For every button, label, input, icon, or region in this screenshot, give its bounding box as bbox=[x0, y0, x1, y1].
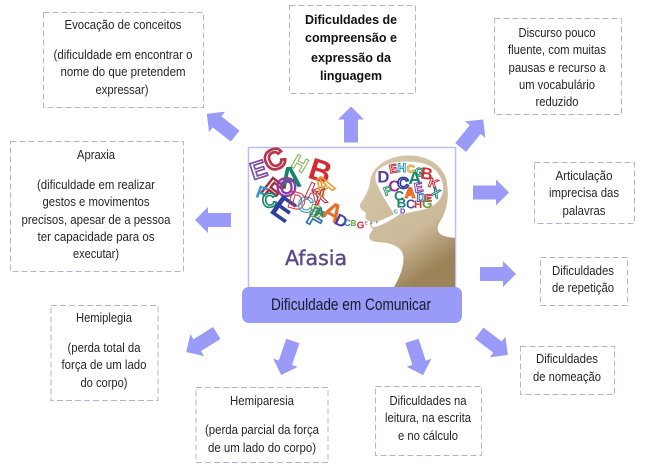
icon: letters inside the brain: H bbox=[397, 161, 406, 175]
box: Dificuldades de compreensão e expressão da linguagem: compreensão e bbox=[305, 30, 397, 45]
arrow: to Leitura bbox=[400, 337, 435, 379]
box: Apraxia: ter capacidade para os bbox=[38, 229, 155, 244]
box: Articulação imprecisa das palavras: Articulação bbox=[556, 168, 612, 183]
box: Hemiplegia bbox=[51, 306, 158, 400]
arrow: to Dificuldades de compreensão bbox=[338, 106, 364, 142]
box: Evocação de conceitos: Evocação de conceitos bbox=[64, 17, 182, 32]
icon: letters inside the brain: H bbox=[414, 199, 422, 211]
box: Hemiplegia: Hemiplegia bbox=[76, 310, 133, 325]
icon: letters spoken from the mouth bbox=[247, 141, 379, 235]
icon: letters inside the brain: A bbox=[405, 184, 415, 200]
icon: letters inside the brain: C bbox=[397, 175, 409, 192]
icon: letters inside the brain: C bbox=[394, 188, 404, 204]
banner: Dificuldade em Comunicar: Dificuldade em Comunicar bbox=[271, 296, 431, 314]
icon: letters spoken from the mouth: B bbox=[351, 219, 357, 228]
box: Dificuldades na leitura, na escrita e no cálculo: e no cálculo bbox=[398, 428, 458, 443]
icon: letters spoken from the mouth: D bbox=[332, 210, 351, 232]
box: Apraxia: executar) bbox=[73, 246, 119, 261]
box: Dificuldades de compreensão e expressão da linguagem bbox=[290, 6, 416, 94]
box: Dificuldades de nomeação: de nomeação bbox=[533, 369, 601, 384]
icon: letters inside the brain: F bbox=[382, 183, 393, 199]
box: Articulação imprecisa das palavras: palavras bbox=[562, 203, 606, 218]
icon: letters spoken from the mouth: A bbox=[313, 203, 326, 221]
icon: letters spoken from the mouth: C bbox=[344, 218, 351, 228]
icon: letters inside the brain: A bbox=[408, 168, 421, 188]
box: Dificuldades de nomeação bbox=[520, 346, 614, 394]
arrow: to Articulação bbox=[473, 180, 509, 206]
icon: letters spoken from the mouth: F bbox=[253, 182, 270, 204]
box: Dificuldades na leitura, na escrita e no cálculo bbox=[376, 386, 482, 456]
box: Articulação imprecisa das palavras: imprecisa das bbox=[549, 185, 619, 200]
icon: letters inside the brain: B bbox=[419, 163, 434, 184]
icon: letters spoken from the mouth: D bbox=[285, 186, 309, 217]
icon: letters spoken from the mouth: E bbox=[264, 188, 302, 230]
icon: letters spoken from the mouth: O bbox=[275, 173, 297, 203]
panel: central illustration bbox=[247, 141, 456, 290]
icon: letters spoken from the mouth: B bbox=[307, 200, 325, 222]
icon: letters inside the brain: K bbox=[426, 175, 441, 192]
icon: letters inside the brain: X bbox=[429, 185, 443, 202]
arrow: to Apraxia bbox=[195, 207, 231, 233]
icon: letters inside the brain: C bbox=[406, 198, 415, 212]
icon: letters inside the brain: E bbox=[425, 194, 432, 205]
box: Dificuldades de compreensão e expressão da linguagem: linguagem bbox=[320, 68, 382, 83]
icon: letters spoken from the mouth: F bbox=[256, 172, 289, 207]
box: Discurso pouco fluente: um vocabulário bbox=[519, 77, 595, 92]
arrow: to Repetição bbox=[480, 261, 516, 287]
box: Apraxia: (dificuldade em realizar bbox=[37, 177, 156, 192]
icon: letters spoken from the mouth: E bbox=[247, 155, 270, 186]
icon: letters spoken from the mouth: F bbox=[376, 220, 379, 224]
icon: letters spoken from the mouth: G bbox=[357, 220, 365, 231]
icon: letters inside the brain: C bbox=[407, 164, 415, 176]
arrow: to Nomeação bbox=[471, 323, 516, 365]
arrow: to Discurso bbox=[451, 111, 493, 156]
box: Hemiparesia: (perda parcial da força bbox=[205, 422, 320, 437]
box: Apraxia: precisos, apesar de a pessoa bbox=[22, 212, 171, 227]
icon: letters inside the brain: E bbox=[413, 179, 424, 196]
icon: letters spoken from the mouth: A bbox=[309, 169, 339, 203]
box: Hemiparesia: de um lado do corpo) bbox=[208, 440, 316, 455]
box: Apraxia: gestos e movimentos bbox=[42, 194, 150, 209]
box: Dificuldades de compreensão e expressão da linguagem: expressão da bbox=[311, 50, 392, 65]
box: Dificuldades de repetição: de repetição bbox=[552, 280, 614, 295]
icon: letters spoken from the mouth: K bbox=[301, 178, 329, 210]
box: Hemiparesia: Hemiparesia bbox=[230, 393, 295, 408]
icon: letters spoken from the mouth: B bbox=[305, 152, 336, 191]
box: Evocação de conceitos: nome do que pretendem bbox=[60, 64, 186, 79]
icon: head silhouette bbox=[360, 155, 455, 287]
arrow: to Hemiparesia bbox=[269, 337, 305, 379]
icon: letters inside the brain: G bbox=[413, 165, 425, 180]
icon: letters spoken from the mouth: C bbox=[260, 189, 278, 213]
box: Dificuldades de nomeação: Dificuldades bbox=[536, 351, 598, 366]
box: Hemiparesia bbox=[196, 388, 328, 462]
box: Hemiplegia: do corpo) bbox=[80, 375, 128, 390]
box: Articulação imprecisa das palavras bbox=[534, 162, 634, 224]
icon: letters inside the brain: D bbox=[400, 206, 405, 215]
icon: letters inside the brain: E bbox=[388, 161, 398, 176]
box: Discurso pouco fluente: Discurso pouco bbox=[518, 25, 596, 40]
icon: letters spoken from the mouth: F bbox=[302, 203, 329, 235]
box: Discurso pouco fluente bbox=[494, 18, 622, 114]
box: Evocação de conceitos: (dificuldade em encontrar o bbox=[54, 47, 192, 62]
icon: letters inside the brain: D bbox=[417, 191, 426, 205]
text: Afasia: Afasia bbox=[285, 246, 347, 270]
icon: letters spoken from the mouth: E bbox=[365, 221, 368, 226]
icon: letters spoken from the mouth: A bbox=[277, 160, 304, 196]
arrow: to Evocação bbox=[199, 104, 243, 146]
icon: letters inside the brain: C bbox=[394, 209, 398, 215]
box: Hemiplegia: (perda total da bbox=[68, 340, 141, 355]
box: Apraxia bbox=[10, 142, 184, 272]
icon: letters inside the brain bbox=[377, 161, 443, 215]
box: Dificuldades de repetição: Dificuldades bbox=[552, 263, 614, 278]
box: Discurso pouco fluente: pausas e recurso a bbox=[508, 60, 606, 75]
icon: letters inside the brain: G bbox=[422, 196, 432, 211]
arrow: to Hemiplegia bbox=[179, 322, 224, 363]
box: Discurso pouco fluente: reduzido bbox=[536, 94, 578, 109]
icon: letters inside the brain: B bbox=[397, 196, 407, 211]
icon: letters spoken from the mouth: A bbox=[317, 194, 349, 230]
box: Dificuldades de repetição bbox=[540, 258, 628, 306]
icon: letters spoken from the mouth: A bbox=[370, 221, 373, 225]
box: Hemiplegia: força de um lado bbox=[62, 357, 146, 372]
box: Dificuldades na leitura, na escrita e no cálculo: leitura, na escrita bbox=[385, 410, 472, 425]
icon: letters spoken from the mouth: C bbox=[259, 141, 291, 179]
icon: letters spoken from the mouth: X bbox=[311, 185, 330, 210]
icon: letters spoken from the mouth: C bbox=[296, 191, 316, 218]
box: Dificuldades na leitura, na escrita e no cálculo: Dificuldades na bbox=[390, 393, 467, 408]
icon: letters inside the brain: C bbox=[388, 179, 400, 196]
box: Dificuldades de compreensão e expressão da linguagem: Dificuldades de bbox=[305, 12, 397, 27]
icon: letters spoken from the mouth: H bbox=[287, 150, 312, 178]
box: Evocação de conceitos: expressar) bbox=[96, 82, 148, 97]
icon: letters inside the brain: D bbox=[377, 168, 389, 187]
box: Apraxia: Apraxia bbox=[77, 147, 116, 162]
banner: Dificuldade em Comunicar bbox=[242, 287, 462, 323]
box: Discurso pouco fluente: fluente, com muitas bbox=[508, 42, 606, 57]
box: Evocação de conceitos bbox=[44, 12, 204, 108]
